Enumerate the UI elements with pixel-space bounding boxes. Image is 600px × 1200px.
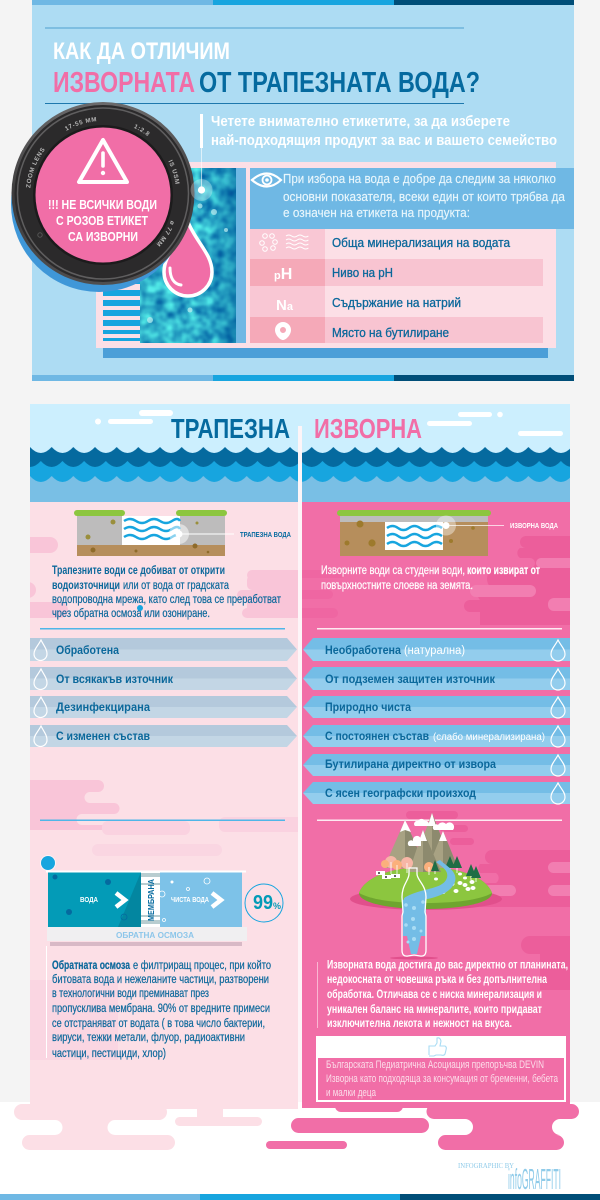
warning text: !!! НЕ ВСИЧКИ ВОДИ <box>48 197 157 212</box>
subheading text: Четете внимателно етикетите, за да изберете <box>211 114 510 130</box>
membrane label: МЕМБРАНА <box>146 879 156 921</box>
icon: drop <box>164 222 212 296</box>
text: reverse osmosis: битовата вода и нежеланите частици, разтворени <box>52 974 269 986</box>
text: spring water intro: повърхностните слоеве на земята. <box>321 580 473 592</box>
lens warning <box>11 102 194 292</box>
clouds <box>408 819 454 846</box>
section titles: ТРАПЕЗНА <box>171 413 290 444</box>
icon: pH: pH <box>274 266 292 283</box>
text: spring water origin: изключителна лекота и нежност на вкуса. <box>327 1018 512 1030</box>
diagram: reverse osmosis: ЧИСТА ВОДА <box>171 897 209 904</box>
arrows <box>116 893 221 907</box>
diagram: reverse osmosis: ВОДА <box>80 897 98 904</box>
illustration: mountain island with bottle <box>350 813 502 960</box>
warning text: СА ИЗВОРНИ <box>68 229 138 244</box>
stat: 99%: 99 <box>253 892 273 914</box>
text: spring water intro: Изворните води са студени води, <box>321 565 465 577</box>
diagram: table water <box>74 510 291 556</box>
intro text: При избора на вода е добре да следим за няколко <box>283 171 556 186</box>
panel: label card <box>96 162 556 358</box>
text: table water intro: водоизточници <box>52 580 120 592</box>
text: table water intro <box>52 565 282 620</box>
text: reverse osmosis: вируси, тежки метали, флуор, радиоактивни <box>52 1032 245 1044</box>
lens ring text: ZOOM LENS <box>26 148 44 188</box>
row labels: Място на бутилиране <box>332 326 449 340</box>
warning text <box>48 197 157 244</box>
lens ring text: IS USM <box>168 160 180 184</box>
diagram label: ИЗВОРНА ВОДА <box>510 523 558 530</box>
text: table water intro: или от вода от градската <box>123 580 229 592</box>
row: processed <box>30 638 297 661</box>
row: any source <box>30 667 297 690</box>
subheading text <box>200 114 557 149</box>
warning text: С РОЗОВ ЕТИКЕТ <box>56 213 148 228</box>
recommendation text <box>326 1059 558 1099</box>
row: naturally pure: Природно чиста <box>325 700 411 714</box>
diagram: reverse osmosis <box>40 855 283 1058</box>
panel: indicators <box>250 168 574 343</box>
text: spring water origin <box>317 960 568 1030</box>
mountains <box>384 813 458 872</box>
row: naturally pure <box>303 696 570 718</box>
recommendation text: и малки деца <box>326 1087 376 1099</box>
bottle <box>390 868 438 960</box>
row: constant composition: (слабо минерализирана) <box>433 731 545 743</box>
row: any source: От всякакъв източник <box>56 672 174 686</box>
section titles <box>171 413 422 444</box>
list: table water properties <box>30 638 297 747</box>
text: reverse osmosis: Обратната осмоза <box>52 960 130 972</box>
row labels: Ниво на pH <box>332 266 393 280</box>
bottom colour bar <box>0 1194 600 1200</box>
lens ring text: ø 77 MM <box>156 220 174 247</box>
panel: table water <box>20 502 308 1109</box>
stat: 99% <box>245 884 283 922</box>
icon: thumbs up <box>429 1038 446 1056</box>
intro text: е означен на етикета на продукта: <box>283 205 470 220</box>
row labels: Обща минерализация на водата <box>332 236 510 250</box>
text: table water intro: Трапезните води се добиват от открити <box>52 565 225 577</box>
title: ОТ ТРАПЕЗНАТА ВОДА? <box>199 67 480 99</box>
row: unprocessed: (натурална) <box>404 645 465 657</box>
text: reverse osmosis: е филтриращ процес, при който <box>133 960 271 972</box>
bottom blobs <box>14 1100 579 1150</box>
text: reverse osmosis: пропусклива мембрана. 90% от вредните примеси <box>52 1003 270 1015</box>
icon: Na: Na <box>276 297 294 314</box>
text: reverse osmosis: се отстраняват от водата ( в това число бактерии, <box>52 1018 265 1030</box>
lens ring text <box>26 117 180 247</box>
callout: pediatric recommendation <box>316 1036 566 1102</box>
row labels <box>332 236 510 340</box>
title: КАК ДА ОТЛИЧИМ <box>53 38 230 65</box>
background blobs <box>330 536 570 990</box>
osmosis caption: ОБРАТНА ОСМОЗА <box>116 930 194 940</box>
trees <box>381 856 481 882</box>
row: unprocessed: Необработена <box>325 643 401 657</box>
wave header <box>30 404 570 502</box>
cows and sheep <box>376 871 476 894</box>
text: spring water origin: уникален баланс на минералите, които придават <box>327 1004 542 1016</box>
title <box>53 38 480 99</box>
row: bottled at source <box>303 754 570 776</box>
credit: infographic by infoGRAFFITI <box>458 1162 561 1196</box>
section titles: ИЗВОРНА <box>314 413 422 444</box>
text: reverse osmosis: частици, пестициди, хлор) <box>52 1048 166 1060</box>
diagram label: ТРАПЕЗНА ВОДА <box>240 532 291 539</box>
row: changed composition <box>30 725 297 747</box>
icon: warning triangle <box>79 140 127 182</box>
row: underground source <box>303 667 570 690</box>
list: spring water properties <box>303 638 570 804</box>
lens ring text: 17-55 MM <box>65 117 96 131</box>
text: table water intro: водопроводна мрежа, като след това се преработват <box>52 594 282 606</box>
clouds <box>95 410 563 436</box>
panel: header <box>32 0 574 381</box>
river <box>404 860 455 906</box>
row: constant composition: С постоянен състав <box>325 729 429 743</box>
callout dot <box>190 148 212 201</box>
row: bottled at source: Бутилирана директно от извора <box>325 757 496 771</box>
credit: infographic by infoGRAFFITI: INFOGRAPHIC BY <box>458 1162 514 1170</box>
row: constant composition <box>303 725 570 747</box>
text: spring water intro <box>321 565 540 592</box>
row: underground source: От подземен защитен източник <box>325 672 496 686</box>
text: spring water intro: които извират от <box>467 565 540 577</box>
panel: spring water <box>295 502 580 1108</box>
text: reverse osmosis: в технологични води преминават през <box>52 988 209 1000</box>
row backgrounds <box>250 229 543 343</box>
subheading text: най-подходящия продукт за вас и вашето семейство <box>211 133 557 149</box>
text: reverse osmosis <box>52 960 271 1060</box>
row labels: Съдържание на натрий <box>332 296 461 310</box>
divider <box>298 426 302 1102</box>
row: clear origin: С ясен географски произход <box>325 786 476 800</box>
diagram: spring water <box>337 510 558 556</box>
row: disinfected: Дезинфекцирана <box>56 700 150 714</box>
stat: 99%: % <box>273 901 281 911</box>
icon: eye <box>252 174 281 186</box>
background blobs <box>20 537 308 1060</box>
divider lines <box>40 628 285 821</box>
row: changed composition: С изменен състав <box>56 729 150 743</box>
water photo with drop <box>140 168 246 343</box>
row: unprocessed <box>303 638 570 661</box>
icon: location pin <box>275 322 291 340</box>
barcode stripes <box>103 278 140 341</box>
title: ИЗВОРНАТА <box>53 67 195 99</box>
row: processed: Обработена <box>56 643 119 657</box>
text: table water intro: чрез обратна осмоза или озониране. <box>52 608 210 620</box>
intro text <box>283 171 566 220</box>
row: clear origin <box>303 782 570 804</box>
intro text: основни показателя, всеки един от които трябва да <box>283 189 566 204</box>
lens ring text: 1:2.8 <box>134 124 150 136</box>
row: disinfected <box>30 696 297 718</box>
icon: minerals <box>260 234 308 251</box>
